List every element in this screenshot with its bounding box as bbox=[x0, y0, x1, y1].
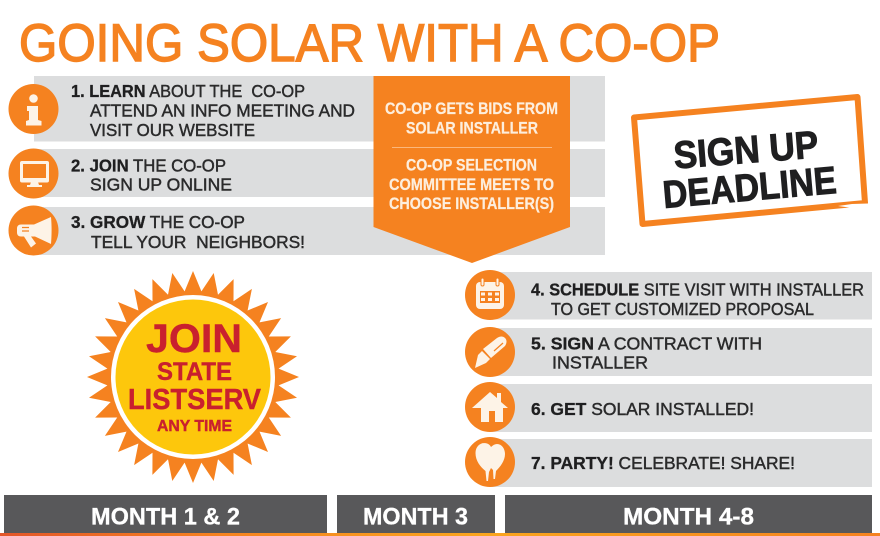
month 3 bar bbox=[337, 495, 495, 533]
bids text bbox=[385, 100, 558, 138]
icon: monitor bbox=[8, 148, 58, 198]
step 1 text bbox=[71, 81, 355, 140]
step 1 line 2: ATTEND AN INFO MEETING AND bbox=[90, 100, 355, 120]
step 7 bar bbox=[490, 439, 872, 487]
selection text bbox=[389, 156, 554, 213]
stamp line 2: DEADLINE bbox=[661, 159, 838, 217]
sun rays bbox=[87, 271, 299, 483]
panel: steps 1 to 3 bbox=[8, 76, 605, 256]
stamp frame bbox=[634, 97, 865, 224]
selection line 1: CO-OP SELECTION bbox=[406, 156, 537, 174]
selection line 3: CHOOSE INSTALLER(S) bbox=[389, 195, 554, 213]
step 4 text bbox=[531, 280, 864, 319]
label: month 3: MONTH 3 bbox=[363, 504, 468, 530]
step 3 bar bbox=[34, 207, 605, 255]
step 1 bar bbox=[34, 76, 605, 142]
timeline: month bars bbox=[0, 495, 880, 536]
step 1 heading: 1. LEARN ABOUT THE CO-OP bbox=[71, 81, 305, 101]
sun word: listserv: LISTSERV bbox=[128, 384, 262, 416]
sun word: join: JOIN bbox=[146, 317, 242, 361]
sun words: any time: ANY TIME bbox=[157, 418, 232, 435]
step 3 heading: 3. GROW THE CO-OP bbox=[71, 212, 245, 232]
step 7 text: 7. PARTY! CELEBRATE! SHARE! bbox=[531, 453, 795, 473]
icon: balloons bbox=[465, 437, 515, 487]
step 6 bar bbox=[490, 384, 872, 432]
icon: house bbox=[465, 382, 515, 432]
bids line 1: CO-OP GETS BIDS FROM bbox=[385, 100, 558, 118]
step 1 line 3: VISIT OUR WEBSITE bbox=[90, 120, 255, 140]
step 5 text bbox=[531, 334, 762, 372]
step 6 text: 6. GET SOLAR INSTALLED! bbox=[531, 399, 754, 419]
sun white ring bbox=[111, 295, 275, 459]
month 4 to 8 bar bbox=[505, 495, 872, 533]
gradient strip bbox=[0, 533, 880, 536]
step 4 bar bbox=[490, 272, 872, 320]
icon: info bbox=[8, 84, 58, 134]
icon: megaphone bbox=[8, 206, 58, 256]
step 3 text bbox=[71, 212, 305, 252]
month 1 and 2 bar bbox=[4, 495, 327, 533]
step 5 bar bbox=[490, 328, 872, 376]
step 3 line 2: TELL YOUR NEIGHBORS! bbox=[91, 232, 305, 252]
step 2 text bbox=[71, 156, 232, 194]
selection line 2: COMMITTEE MEETS TO bbox=[389, 176, 554, 194]
step 2 heading: 2. JOIN THE CO-OP bbox=[71, 156, 226, 176]
icon: calendar bbox=[465, 270, 515, 320]
arrow shape bbox=[374, 76, 570, 263]
step 2 bar bbox=[34, 149, 605, 197]
step 4 line 2: TO GET CUSTOMIZED PROPOSAL bbox=[551, 299, 814, 319]
step 5 heading: 5. SIGN A CONTRACT WITH bbox=[531, 334, 762, 354]
sun badge: join state listserv bbox=[87, 271, 299, 483]
step 4 heading: 4. SCHEDULE SITE VISIT WITH INSTALLER bbox=[531, 280, 864, 300]
step 5 line 2: INSTALLER bbox=[552, 352, 648, 372]
sun yellow disc bbox=[116, 300, 270, 454]
stamp line 1: SIGN UP bbox=[672, 123, 820, 178]
icon: pen bbox=[465, 327, 515, 377]
bids line 2: SOLAR INSTALLER bbox=[406, 120, 538, 138]
panel: month 3 orange arrow bbox=[374, 76, 570, 263]
label: month 4 to 8: MONTH 4-8 bbox=[623, 504, 754, 530]
sun word: state: STATE bbox=[157, 358, 232, 386]
panel: steps 4 to 7 bbox=[465, 270, 872, 487]
title: GOING SOLAR WITH A CO-OP bbox=[19, 14, 720, 73]
label: month 1 and 2: MONTH 1 & 2 bbox=[91, 504, 240, 530]
step 2 line 2: SIGN UP ONLINE bbox=[90, 174, 232, 194]
stamp: sign up deadline bbox=[634, 97, 869, 224]
